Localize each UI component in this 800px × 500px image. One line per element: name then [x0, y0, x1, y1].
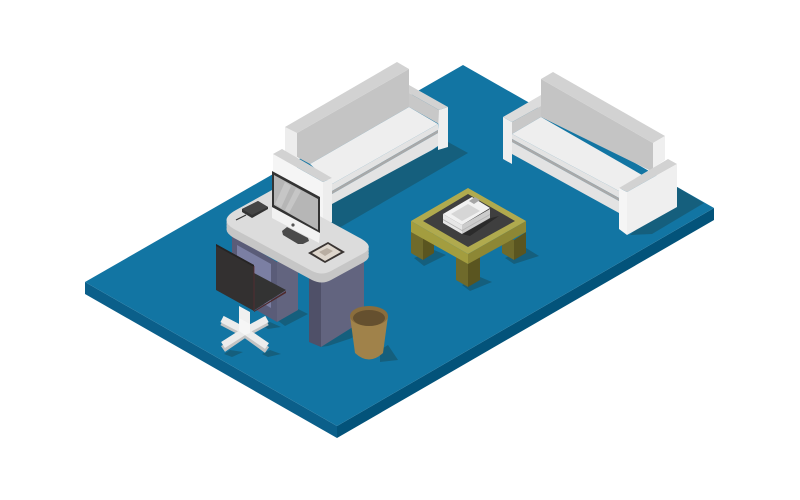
- sofa: back left: [273, 62, 468, 240]
- tablet: [308, 242, 345, 263]
- newspaper stack: [443, 197, 490, 234]
- power adapter: [236, 201, 268, 220]
- table leg: left: [411, 232, 434, 260]
- office chair: [216, 244, 286, 357]
- desk pedestal: left: [232, 235, 298, 322]
- table leg: front: [456, 256, 480, 287]
- desk pedestal: right: [309, 255, 364, 347]
- floor platform: [85, 65, 714, 438]
- sofa: right: [503, 72, 704, 235]
- coffee table: [411, 188, 539, 291]
- chair base: [222, 306, 267, 350]
- monitor: [272, 171, 320, 244]
- desk: [226, 171, 369, 347]
- waste bin: [350, 306, 398, 362]
- desktop slab: [226, 190, 369, 282]
- table leg: right: [502, 232, 526, 260]
